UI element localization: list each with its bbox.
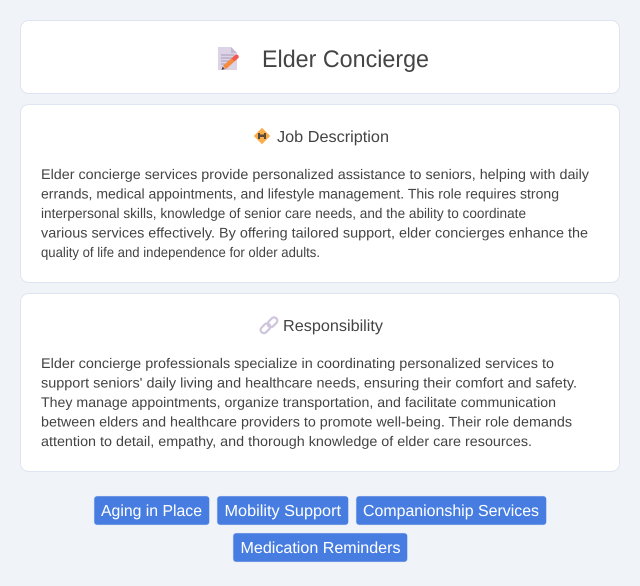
heading: responsibility: Responsibility [283,318,383,335]
tag: mobility support [217,496,348,525]
tag: companionship services [356,496,546,525]
text: job description body: interpersonal skills, knowledge of senior care needs, and the ability to coordinate [41,205,526,221]
icon: memo with pencil [218,47,237,70]
text: job description body: various services effectively. By offering tailored support, elder concierges enhance the [41,224,588,240]
text: responsibility body: Elder concierge professionals specialize in coordinating personalized services to [41,355,554,371]
tag: mobility support: Mobility Support [224,503,342,520]
text: responsibility body [41,355,577,449]
panel: responsibility [20,294,620,472]
text: job description body: errands, medical appointments, and lifestyle management. This role requires strong [41,186,559,202]
tag: companionship services: Companionship Services [363,503,539,520]
text: job description body: Elder concierge services provide personalized assistance to seniors, helping with daily [41,166,589,182]
tag: aging in place [94,496,210,525]
text: job description body [41,166,589,260]
tag: aging in place: Aging in Place [101,503,202,520]
text: job description body: quality of life and independence for older adults. [41,244,320,260]
tags [94,496,546,562]
tag: medication reminders [233,533,408,562]
text: responsibility body: attention to detail, empathy, and thorough knowledge of elder care resources. [41,433,532,449]
text: responsibility body: support seniors' daily living and healthcare needs, ensuring their comfort and safety. [41,374,577,390]
icon: orange diamond [254,128,270,144]
text: responsibility body: between elders and healthcare providers to promote well-being. Their role demands [41,414,572,430]
icon: chain link [259,316,279,334]
text: responsibility body: They manage appointments, organize transportation, and facilitate communication [41,394,556,410]
panel: title header [20,20,620,94]
heading: job description: Job Description [277,129,389,146]
panel: job description [20,104,620,282]
tag: medication reminders: Medication Reminders [240,540,400,557]
title: Elder Concierge [262,46,429,73]
